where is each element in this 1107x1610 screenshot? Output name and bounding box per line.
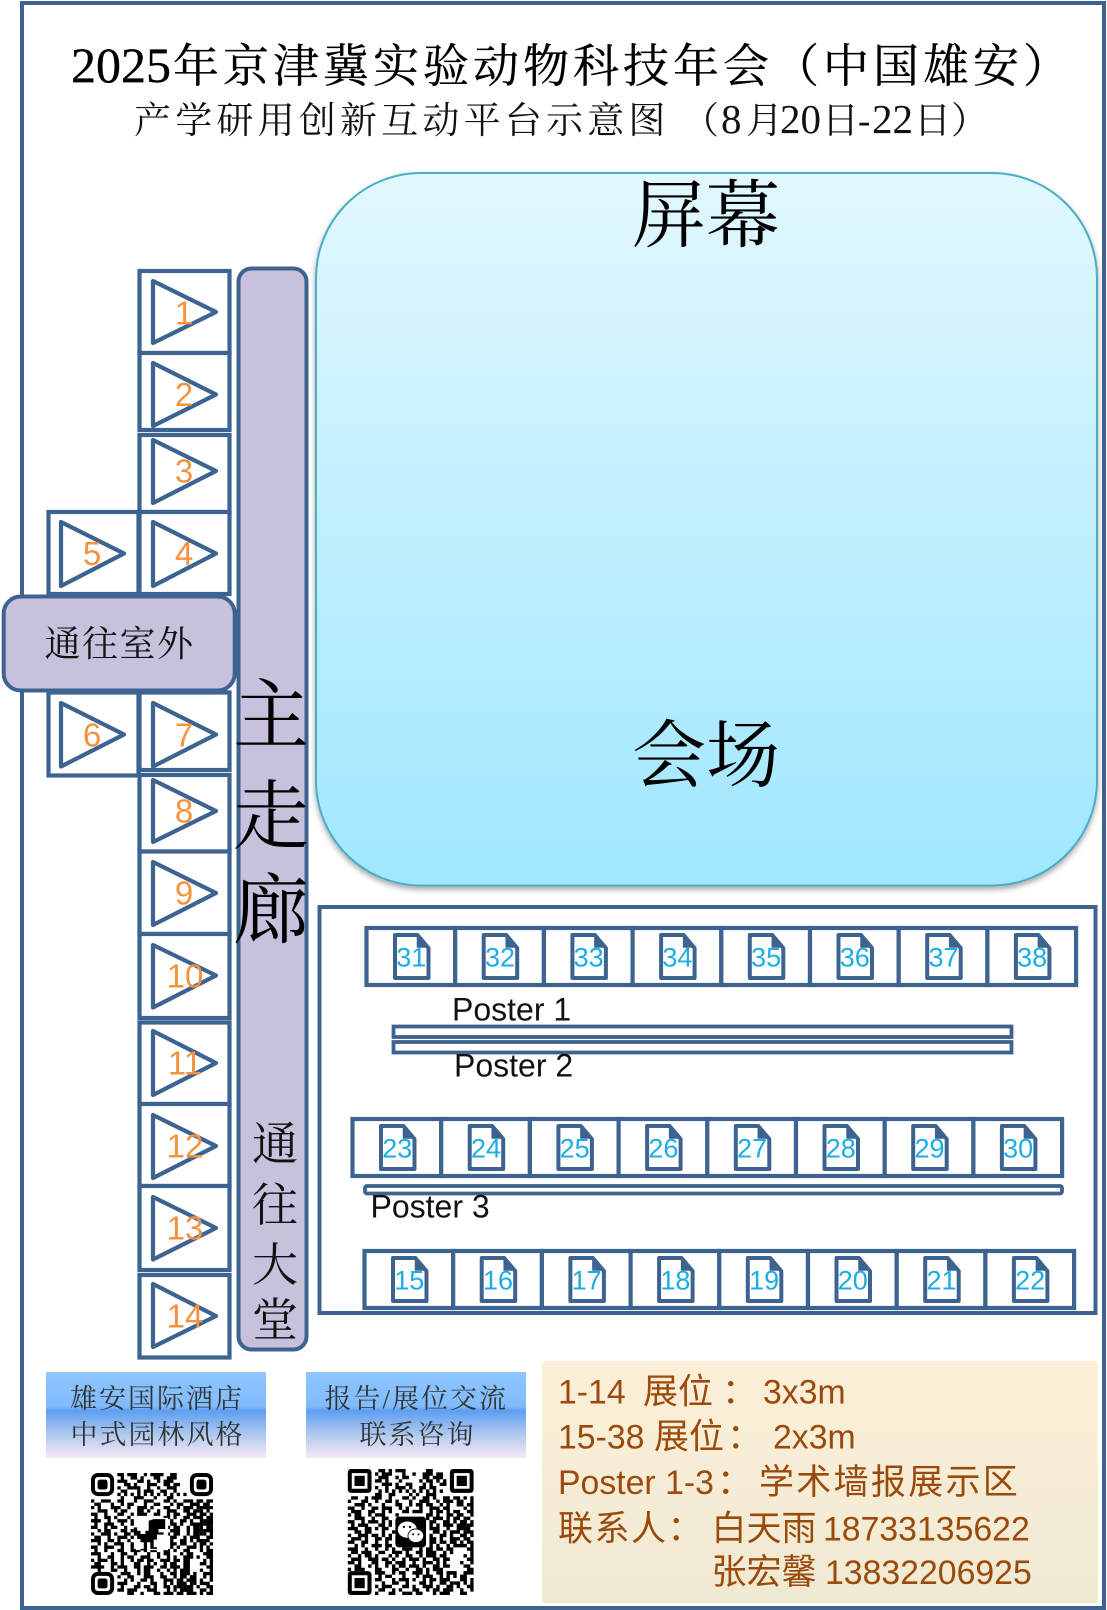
booth 4 bbox=[140, 512, 230, 594]
booth row 23-30 bbox=[352, 1119, 1062, 1176]
booth 7 bbox=[140, 692, 230, 770]
booth row 31-38: 32 bbox=[485, 943, 515, 973]
subtitle: ） bbox=[951, 101, 988, 142]
subtitle: 月 bbox=[746, 101, 783, 142]
booth 14 bbox=[140, 1275, 230, 1358]
to lobby label: 通 bbox=[252, 1119, 298, 1170]
booth 8: 8 bbox=[175, 792, 193, 830]
booth size 1-14: 1-14 bbox=[558, 1374, 626, 1412]
booth row 23-30: 27 bbox=[737, 1134, 767, 1164]
booth 12: 12 bbox=[167, 1128, 203, 1164]
poster area: 学术墙报展示区 bbox=[759, 1463, 1020, 1502]
booth 1: 1 bbox=[175, 294, 193, 332]
booth size 15-38: 15-38 bbox=[558, 1419, 644, 1457]
banner: consultation bbox=[306, 1372, 526, 1458]
booth 14: 14 bbox=[167, 1298, 203, 1334]
label: Poster 2: Poster 2 bbox=[454, 1048, 573, 1084]
booth 1 bbox=[140, 271, 230, 353]
corridor heading: 主 bbox=[233, 675, 309, 759]
booth 2: 2 bbox=[175, 376, 193, 413]
contact 1: 18733135622 bbox=[823, 1511, 1030, 1549]
to lobby label: 堂 bbox=[252, 1295, 298, 1346]
booth 11: 11 bbox=[168, 1044, 202, 1082]
to lobby label: 大 bbox=[252, 1240, 298, 1291]
poster area: Poster 1-3 bbox=[558, 1464, 714, 1502]
outdoor label: 通往室外 bbox=[44, 624, 195, 664]
extra modules, right and lower columns bbox=[446, 1498, 474, 1593]
panel: information bbox=[542, 1361, 1098, 1604]
subtitle: 22 bbox=[872, 96, 913, 142]
booth row 15-22: 16 bbox=[483, 1266, 513, 1296]
label: venue: 会场 bbox=[632, 716, 780, 798]
booth 11 bbox=[140, 1022, 230, 1104]
booth 8 bbox=[140, 775, 230, 852]
booth row 31-38: 38 bbox=[1017, 943, 1047, 973]
booth row 23-30: 29 bbox=[914, 1134, 945, 1164]
booth row 15-22: 17 bbox=[572, 1266, 602, 1296]
icon: WeChat bbox=[398, 1521, 424, 1543]
banner: hotel: 雄安国际酒店 bbox=[70, 1384, 244, 1414]
booth 3 bbox=[140, 435, 230, 512]
booth 12 bbox=[140, 1104, 230, 1186]
booth row 23-30: 28 bbox=[826, 1134, 856, 1164]
banner: hotel bbox=[46, 1372, 266, 1458]
booth 3: 3 bbox=[175, 452, 193, 490]
booth 6 bbox=[48, 692, 138, 776]
booth row 31-38: 35 bbox=[751, 943, 781, 973]
subtitle: 日 bbox=[914, 101, 951, 142]
booth row 31-38: 34 bbox=[662, 943, 692, 973]
booth row 15-22: 20 bbox=[838, 1266, 868, 1296]
booth size 15-38: 2x3m bbox=[773, 1419, 856, 1457]
icon: dinosaur bbox=[134, 1519, 165, 1550]
subtitle: 8 bbox=[721, 96, 742, 142]
poster wall 1 bbox=[394, 1026, 1012, 1037]
booth row 15-22: 15 bbox=[394, 1266, 424, 1296]
contact 1: 联系人： bbox=[558, 1510, 704, 1549]
title: 年京津冀实验动物科技年会（中国雄安） bbox=[173, 41, 1073, 92]
banner: hotel: 中式园林风格 bbox=[70, 1420, 244, 1450]
QR code: WeChat contact bbox=[348, 1469, 474, 1595]
booth 13 bbox=[140, 1186, 230, 1270]
label: Poster 3: Poster 3 bbox=[370, 1188, 490, 1224]
poster wall 3 bbox=[365, 1186, 1062, 1194]
corridor heading: 廊 bbox=[233, 870, 309, 954]
booth 13: 13 bbox=[167, 1210, 203, 1246]
label: Poster 1: Poster 1 bbox=[452, 992, 571, 1028]
booth row 15-22 bbox=[364, 1251, 1074, 1308]
booth size 15-38: 展位 bbox=[654, 1418, 724, 1457]
booth 6: 6 bbox=[83, 716, 101, 754]
label: screen: 屏幕 bbox=[632, 176, 780, 258]
booth row 23-30: 26 bbox=[648, 1134, 678, 1164]
booth 4: 4 bbox=[175, 535, 193, 572]
subtitle: （ bbox=[682, 101, 719, 142]
booth size 1-14: 3x3m bbox=[763, 1374, 846, 1412]
contact 2: 张宏馨 bbox=[712, 1553, 817, 1592]
booth row 23-30: 30 bbox=[1003, 1134, 1033, 1164]
booth row 23-30: 23 bbox=[382, 1134, 412, 1164]
booth row 31-38: 36 bbox=[840, 943, 870, 973]
booth size 1-14: 展位 bbox=[643, 1372, 713, 1412]
poster wall 2 bbox=[394, 1042, 1012, 1052]
booth 10 bbox=[140, 934, 230, 1018]
to lobby label: 往 bbox=[252, 1180, 298, 1231]
outdoor passage bbox=[4, 596, 235, 690]
title: 2025 bbox=[71, 37, 171, 93]
booth row 31-38: 31 bbox=[396, 943, 426, 973]
booth 7: 7 bbox=[175, 716, 193, 754]
booth row 31-38: 33 bbox=[574, 943, 604, 973]
booth 5 bbox=[48, 512, 138, 594]
booth row 15-22: 22 bbox=[1015, 1266, 1045, 1296]
booth 5: 5 bbox=[83, 535, 101, 572]
poster area: ： bbox=[717, 1463, 752, 1502]
booth row 23-30: 25 bbox=[560, 1134, 590, 1164]
subtitle: 日 bbox=[822, 101, 859, 142]
contact 1: 白天雨 bbox=[712, 1510, 817, 1549]
QR code: hotel bbox=[91, 1473, 213, 1595]
corridor heading: 走 bbox=[233, 776, 309, 860]
panel: main conference hall bbox=[316, 173, 1097, 886]
booth 9 bbox=[140, 852, 230, 934]
panel: poster and small booth area bbox=[320, 907, 1096, 1313]
booth 9: 9 bbox=[175, 874, 193, 912]
banner: consultation: 报告/展位交流 bbox=[324, 1384, 508, 1414]
subtitle: 20 bbox=[780, 96, 821, 142]
subtitle: - bbox=[858, 101, 870, 142]
booth row 15-22: 18 bbox=[660, 1266, 690, 1296]
booth row 23-30: 24 bbox=[471, 1134, 501, 1164]
booth row 15-22: 19 bbox=[749, 1266, 779, 1296]
booth row 15-22: 21 bbox=[926, 1266, 957, 1296]
booth 10: 10 bbox=[167, 958, 203, 994]
banner: consultation: 联系咨询 bbox=[360, 1420, 476, 1450]
booth 2 bbox=[140, 353, 230, 430]
booth row 31-38: 37 bbox=[928, 943, 959, 973]
booth size 15-38: ： bbox=[727, 1418, 762, 1457]
booth row 31-38 bbox=[366, 928, 1076, 985]
booth size 1-14: ： bbox=[722, 1372, 757, 1412]
extra modules, right and lower columns bbox=[173, 1501, 213, 1593]
main corridor bbox=[233, 268, 309, 1350]
subtitle: 产学研用创新互动平台示意图 bbox=[134, 100, 670, 142]
contact 2: 13832206925 bbox=[825, 1554, 1032, 1592]
